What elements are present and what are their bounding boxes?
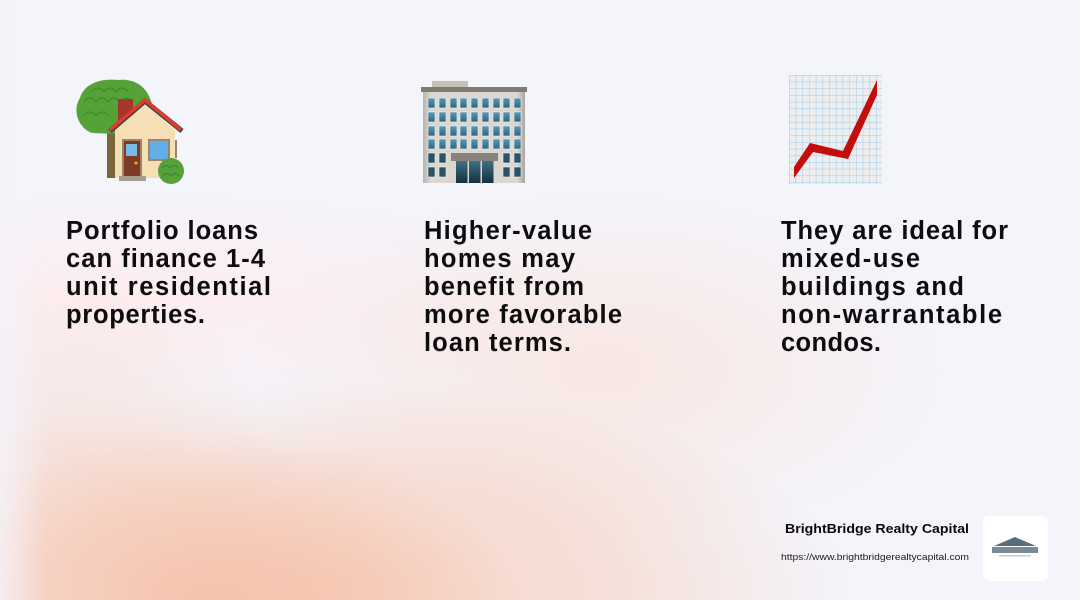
icon: office building (421, 81, 527, 183)
text: higher-value homes: homes may (424, 245, 576, 273)
company name: BrightBridge Realty Capital (785, 521, 969, 536)
text: portfolio loans: Portfolio loans (66, 217, 258, 245)
text: higher-value homes: Higher-value (424, 217, 592, 245)
text: higher-value homes: more favorable (424, 301, 622, 329)
text: mixed-use buildings: non-warrantable (781, 301, 1002, 329)
text: mixed-use buildings: They are ideal for (781, 217, 1008, 245)
text: higher-value homes: benefit from (424, 273, 584, 301)
text: mixed-use buildings: buildings and (781, 273, 964, 301)
panel: higher-value homes (421, 81, 630, 357)
text: mixed-use buildings: mixed-use (781, 245, 920, 273)
text: higher-value homes: loan terms. (424, 329, 571, 357)
text: portfolio loans: properties. (66, 301, 205, 329)
icon: house with tree (76, 80, 184, 184)
logo card (983, 516, 1048, 581)
text: mixed-use buildings: condos. (781, 329, 881, 357)
text: portfolio loans: can finance 1-4 (66, 245, 266, 273)
panel: mixed-use buildings (781, 75, 1016, 357)
panel: 1-4 unit residential (66, 80, 280, 329)
text: portfolio loans: unit residential (66, 273, 271, 301)
website url: https://www.brightbridgerealtycapital.com (781, 552, 969, 563)
footer: company branding (781, 516, 1048, 581)
icon: rising chart (789, 75, 882, 184)
